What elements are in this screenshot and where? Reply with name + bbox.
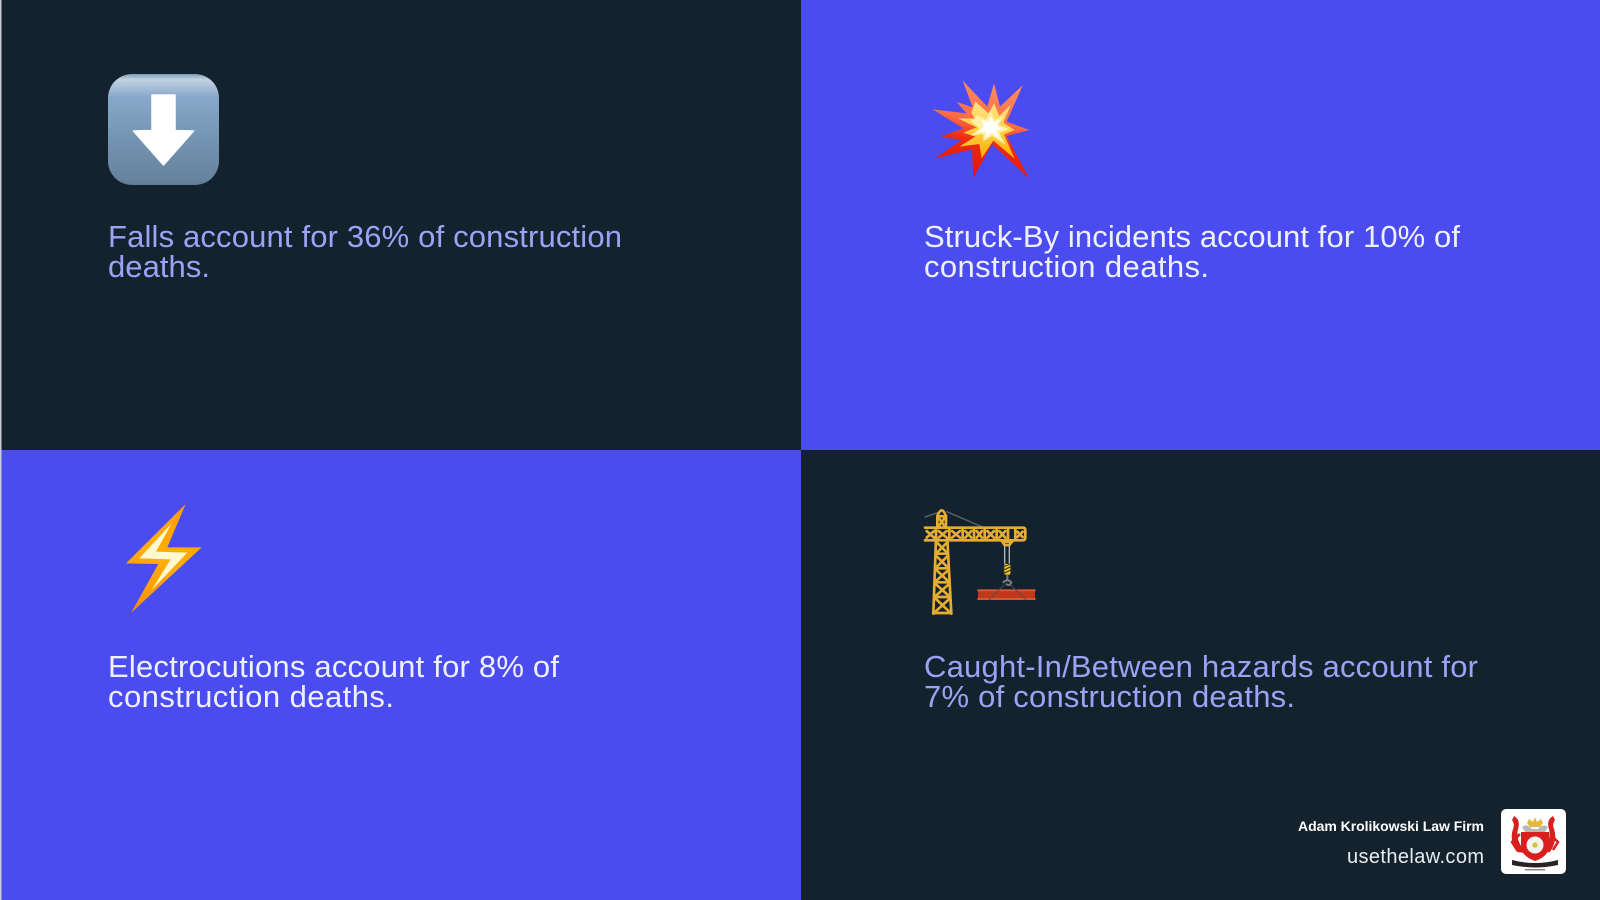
text: website: usethelaw.com xyxy=(1347,846,1484,868)
text: struck-by statistic: Struck-By incidents account for 10% of xyxy=(924,219,1460,254)
text: struck-by statistic: construction deaths. xyxy=(924,249,1209,284)
text: caught-in statistic: 7% of construction deaths. xyxy=(924,679,1295,714)
text: struck-by statistic xyxy=(924,219,1460,284)
text: electrocutions statistic xyxy=(108,649,559,714)
text: firm name: Adam Krolikowski Law Firm xyxy=(1298,818,1484,834)
text: electrocutions statistic: Electrocutions account for 8% of xyxy=(108,649,559,684)
text: caught-in statistic: Caught-In/Between hazards account for xyxy=(924,649,1478,684)
icon: tower crane xyxy=(925,510,1035,614)
text: falls statistic: deaths. xyxy=(108,249,210,284)
icon: explosion xyxy=(933,81,1029,179)
panel: caught-in/between xyxy=(801,450,1600,900)
text: caught-in statistic xyxy=(924,649,1478,714)
panel: electrocutions xyxy=(0,450,801,900)
panel: falls xyxy=(0,0,801,450)
logo: firm crest xyxy=(1501,809,1566,874)
left edge strip xyxy=(0,0,2,900)
text: falls statistic xyxy=(108,219,622,284)
text: electrocutions statistic: construction deaths. xyxy=(108,679,394,714)
icon: lightning bolt xyxy=(126,504,202,613)
footer: firm branding xyxy=(1298,809,1566,874)
icon: down arrow xyxy=(108,74,219,185)
text: falls statistic: Falls account for 36% of construction xyxy=(108,219,622,254)
panel: struck-by xyxy=(801,0,1600,450)
